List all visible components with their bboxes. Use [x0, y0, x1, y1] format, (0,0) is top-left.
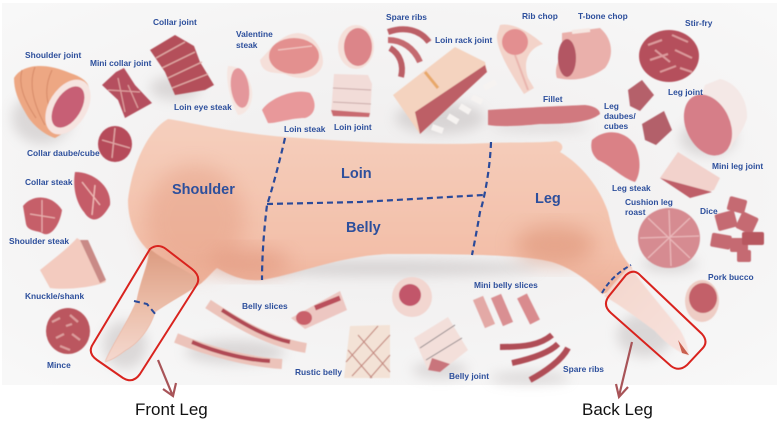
labels: Mini leg joint: [712, 161, 763, 171]
loin eye steak: [227, 66, 252, 115]
fillet: [488, 105, 600, 126]
t-bone chop: [556, 28, 611, 80]
mini leg joint: [660, 152, 720, 198]
labels: daubes/: [604, 111, 636, 121]
front leg: [105, 248, 202, 362]
pork bucco: [685, 280, 719, 322]
cushion leg roast: [638, 208, 700, 268]
labels: Shoulder steak: [9, 236, 69, 246]
red box: front leg: [91, 246, 198, 380]
labels: Leg joint: [668, 87, 703, 97]
leg steak: [591, 132, 640, 182]
shoulder joint: [14, 66, 100, 143]
rustic belly: [344, 325, 390, 378]
labels: Leg steak: [612, 183, 651, 193]
section labels: Belly: [346, 220, 381, 236]
shadows under pieces: [12, 76, 736, 384]
belly round: [392, 277, 432, 317]
labels: Loin eye steak: [174, 102, 232, 112]
arrow: front leg: [158, 360, 176, 396]
labels: Collar daube/cube: [27, 148, 100, 158]
caption: front leg: Front Leg: [135, 400, 208, 419]
back trotter: [604, 266, 689, 356]
section labels: Loin: [341, 166, 372, 182]
spare ribs top: [388, 29, 429, 77]
spare ribs bottom: [500, 335, 568, 380]
labels: Rib chop: [522, 11, 558, 21]
labels: Dice: [700, 206, 718, 216]
leg joint: [675, 79, 747, 163]
section labels: Shoulder: [172, 182, 235, 198]
labels: Rustic belly: [295, 367, 342, 377]
labels: Shoulder joint: [25, 50, 82, 60]
leg daube cubes: [628, 80, 672, 145]
labels: Valentine: [236, 29, 273, 39]
labels: Mini belly slices: [474, 280, 538, 290]
labels: Stir-fry: [685, 18, 713, 28]
labels: Fillet: [543, 94, 563, 104]
labels: Spare ribs: [563, 364, 604, 374]
section labels: Leg: [535, 191, 561, 207]
collar joint: [150, 35, 214, 95]
labels: Mince: [47, 360, 71, 370]
collar steak: [74, 172, 110, 219]
labels: Loin rack joint: [435, 35, 492, 45]
shoulder shading: [145, 165, 245, 275]
labels: steak: [236, 40, 258, 50]
loin steak piece: [262, 92, 315, 123]
dice: [710, 196, 764, 262]
labels: Spare ribs: [386, 12, 427, 22]
labels: Mini collar joint: [90, 58, 152, 68]
shoulder steak: [23, 197, 62, 234]
loin joint piece: [331, 74, 372, 117]
labels: cubes: [604, 121, 629, 131]
carcass: [105, 119, 689, 362]
chop top: [338, 25, 374, 69]
labels: Belly joint: [449, 371, 489, 381]
red box: back leg: [606, 272, 706, 369]
belly slices: [176, 304, 306, 364]
labels: Leg: [604, 101, 619, 111]
labels: Loin joint: [334, 122, 372, 132]
labels: roast: [625, 207, 646, 217]
labels: Loin steak: [284, 124, 326, 134]
labels: Cushion leg: [625, 197, 673, 207]
section labels: [172, 166, 561, 236]
mini belly slices: [478, 296, 535, 326]
belly roll: [291, 291, 347, 329]
mini collar joint: [102, 68, 152, 118]
mince: [46, 308, 90, 354]
stir-fry: [639, 30, 699, 82]
arrow: back leg: [616, 342, 632, 397]
caption: back leg: Back Leg: [582, 400, 653, 419]
labels: Pork bucco: [708, 272, 754, 282]
belly joint: [414, 317, 468, 372]
labels: T-bone chop: [578, 11, 628, 21]
collar daube: [98, 126, 132, 162]
labels: Knuckle/shank: [25, 291, 84, 301]
rib chop: [497, 25, 543, 94]
cut lines: [134, 138, 631, 315]
knuckle: [40, 238, 106, 289]
labels: Collar steak: [25, 177, 73, 187]
labels: Collar joint: [153, 17, 197, 27]
valentine steak: [260, 33, 323, 78]
loin rack joint: [393, 47, 496, 134]
labels: Belly slices: [242, 301, 288, 311]
